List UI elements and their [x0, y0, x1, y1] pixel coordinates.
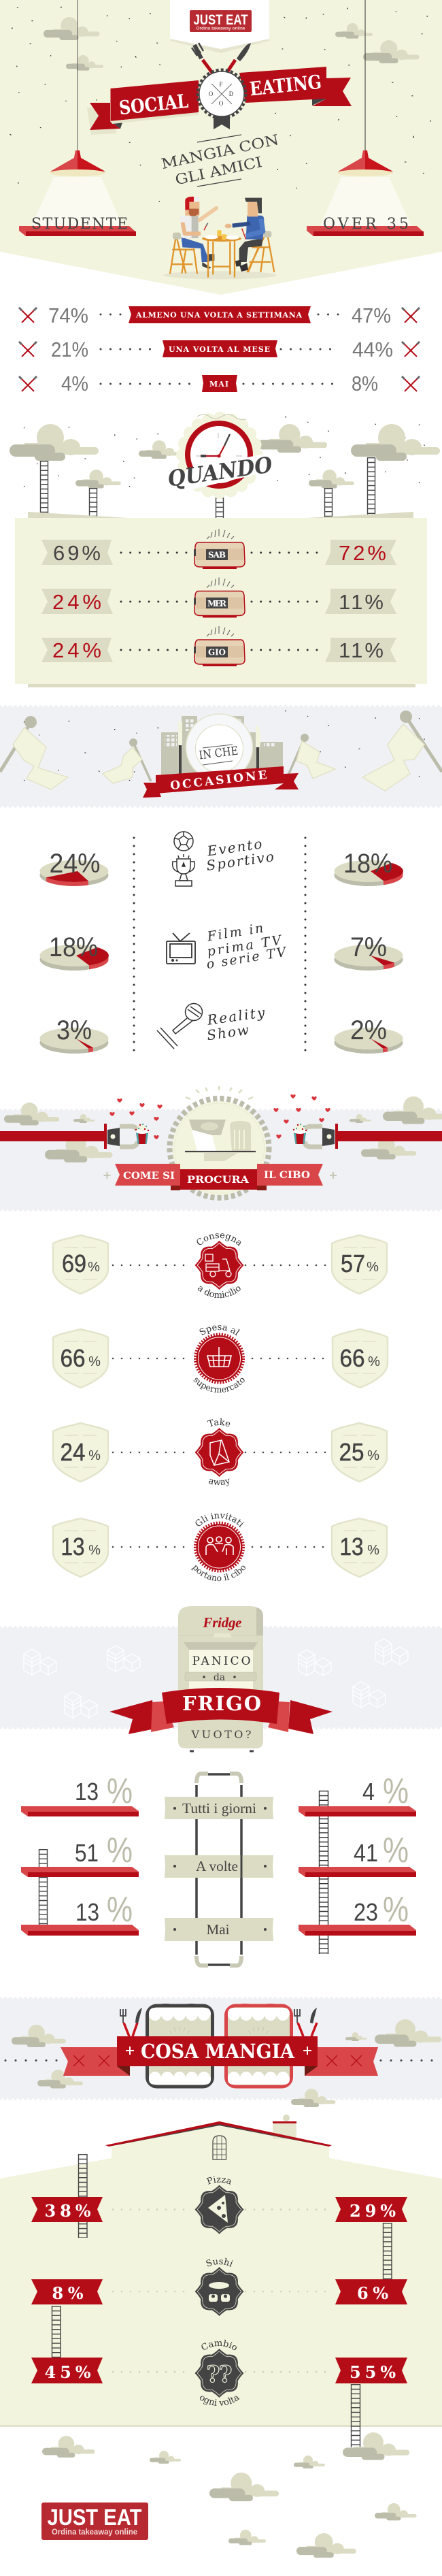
pie: 24%: 24%	[49, 849, 101, 879]
stat row: mai: 8%	[352, 372, 378, 395]
medal: food: O	[209, 91, 214, 97]
method row: take away: %	[367, 1448, 379, 1463]
sign: mai: Mai	[207, 1921, 230, 1938]
method row: spesa al supermercato: %	[88, 1354, 101, 1369]
label: reality show: Reality	[205, 1004, 266, 1028]
panel: quando	[15, 512, 427, 687]
ribbon: come si procura il cibo: COME SI	[123, 1171, 175, 1181]
pie: 18% left: 18%	[49, 932, 98, 962]
food row: cambio ogni volta	[31, 2340, 407, 2406]
label: film in prima tv o serie tv	[205, 921, 288, 972]
logo: just eat: Ordina takeaway online	[196, 26, 245, 31]
footer logo: just eat: Ordina takeaway online	[52, 2528, 137, 2537]
shelf row right: 41%	[299, 1831, 416, 1877]
building ladders	[52, 2154, 392, 2447]
label: film in prima tv o serie tv: prima TV	[206, 932, 284, 960]
two framed plates	[147, 2004, 291, 2087]
illustration: two friends eating at a table	[163, 197, 277, 279]
right friend	[225, 198, 264, 272]
food row: sushi	[31, 2258, 407, 2316]
method row: consegna a domicilio: 57	[341, 1250, 365, 1277]
subtitle: mangia con gli amici	[160, 131, 280, 188]
title ribbon: social eating: EATING	[249, 71, 322, 101]
shelf row left: 13% bottom	[21, 1890, 139, 1936]
quando row: sabato: SAB	[208, 550, 226, 559]
title ribbon: social eating	[87, 67, 352, 135]
stat row: almeno una volta a settimana: ALMENO UNA VOLTA A SETTIMANA	[135, 310, 302, 320]
subtitle: mangia con gli amici: GLI AMICI	[173, 154, 264, 188]
belt right with clamp and cupcake	[293, 1124, 442, 1149]
method row: spesa al supermercato: Spesa al	[199, 1325, 240, 1335]
flags right	[288, 711, 442, 791]
stat row: una volta al mese: 21%	[51, 338, 88, 361]
belt left with clamp and cupcake	[0, 1124, 149, 1149]
logo tab	[170, 0, 269, 53]
method row: spesa al supermercato: 66	[340, 1344, 364, 1372]
method row: take away: 24	[60, 1438, 86, 1466]
method row: take away: Take	[207, 1418, 230, 1426]
band: panico da frigo	[0, 1628, 442, 1727]
quando row: mercoledi: 11%	[339, 590, 384, 614]
ribbon: come si procura il cibo: IL CIBO	[264, 1170, 310, 1181]
pie: 7%: 7%	[350, 932, 387, 962]
food row: pizza: 29%	[350, 2201, 396, 2221]
ribbon: occasione: OCCASIONE	[169, 768, 268, 793]
cosa mangia clouds	[12, 2019, 441, 2107]
quando row: sabato: 69%	[53, 541, 101, 565]
attic window	[213, 2136, 226, 2159]
fridge	[178, 1606, 263, 1751]
footer logo: just eat	[41, 2502, 148, 2540]
method row: gli invitati portano il cibo: %	[88, 1543, 101, 1558]
lamp left: studente	[19, 0, 136, 236]
food row: cambio ogni volta: ??	[207, 2361, 233, 2388]
stat row: almeno una volta a settimana: 47%	[352, 304, 391, 327]
ribbon: frigo	[109, 1688, 333, 1734]
label: evento sportivo: Evento	[205, 836, 263, 860]
footer logo: just eat: JUST EAT	[48, 2505, 141, 2530]
fork and knife pairs	[120, 2008, 317, 2036]
hero background	[0, 0, 442, 295]
icon: ball and trophy	[173, 832, 194, 886]
shelf row right: 23%: 23	[354, 1898, 378, 1926]
medal: food: D	[229, 91, 234, 97]
subtitle: mangia con gli amici: MANGIA CON	[160, 131, 280, 172]
shelf row left: 13%: %	[107, 1772, 133, 1811]
method row: take away: away	[208, 1478, 230, 1486]
method row: take away: %	[88, 1448, 101, 1463]
ribbon: cosa mangia	[61, 2036, 378, 2076]
food row: pizza	[31, 2176, 407, 2234]
food row: sushi: 8%	[52, 2283, 84, 2303]
method row: spesa al supermercato: supermercato	[193, 1377, 245, 1392]
building	[0, 2115, 442, 2427]
shelf row right: 23%	[299, 1890, 416, 1936]
quando row: sabato	[41, 529, 396, 569]
quando ladders	[41, 457, 375, 519]
shelf row right: 4%	[299, 1772, 416, 1816]
shelf row left: 13%: 13	[75, 1778, 99, 1806]
food row: sushi: Sushi	[206, 2258, 233, 2267]
stat row: mai: 4%	[61, 372, 88, 395]
stat row: mai	[19, 372, 420, 395]
cube patterns	[24, 1639, 408, 1718]
pie: 3%: 3%	[56, 1015, 92, 1045]
sign: tutti i giorni	[165, 1797, 273, 1819]
shelf row right: 4%: %	[383, 1772, 409, 1811]
quando row: mercoledi: MER	[207, 599, 227, 608]
quando row: giovedi: GIO	[208, 648, 226, 657]
crossed fork and knife	[192, 43, 251, 74]
shelf row right: 41%: 41	[354, 1839, 378, 1867]
band: come si procura	[0, 1111, 442, 1209]
quando row: giovedi: 11%	[339, 638, 384, 662]
clock badge: quando: QUANDO	[166, 451, 274, 492]
quando clouds	[10, 424, 440, 489]
method row: consegna a domicilio: a domicilio	[197, 1286, 241, 1299]
food row: cambio ogni volta: 45%	[45, 2362, 91, 2382]
label: reality show: Show	[206, 1022, 250, 1043]
ribbon: occasione	[143, 766, 299, 798]
icon: microphone	[157, 1003, 203, 1049]
pie: 24%	[39, 849, 109, 886]
method row: spesa al supermercato: 66	[60, 1344, 86, 1372]
stat row: almeno una volta a settimana: 74%	[48, 304, 88, 327]
pie: 2%: 2%	[350, 1015, 387, 1045]
flags left	[0, 716, 151, 789]
shelf row left: 51%	[21, 1831, 139, 1925]
quando row: giovedi: 24%	[52, 638, 101, 662]
sunburst badge with tray	[170, 1086, 268, 1197]
method row: consegna a domicilio: %	[367, 1260, 379, 1275]
method row: gli invitati portano il cibo: %	[367, 1543, 379, 1558]
pie: 2%	[335, 1015, 403, 1054]
shelf row right: 4%: 4	[362, 1778, 375, 1806]
lamp left: studente: STUDENTE	[31, 216, 128, 233]
food row: pizza: 38%	[45, 2201, 91, 2221]
dotted line behind ribbon	[5, 2059, 434, 2061]
method row: consegna a domicilio	[52, 1233, 388, 1299]
label: reality show	[205, 1004, 266, 1043]
clock badge: quando	[166, 414, 274, 492]
shelf row left: 51%: 51	[75, 1839, 99, 1867]
stat row: una volta al mese	[19, 338, 420, 361]
fridge: PANICO	[192, 1654, 250, 1668]
ribbon: frigo: FRIGO	[182, 1692, 261, 1715]
left friend	[180, 197, 216, 269]
logo: just eat: JUST EAT	[193, 12, 248, 28]
fridge: VUOTO?	[190, 1728, 252, 1741]
medal: food: F	[219, 81, 223, 88]
procura clouds	[4, 1096, 442, 1162]
medal: food	[199, 71, 245, 129]
icon: tv	[167, 933, 195, 964]
method row: gli invitati portano il cibo: 13	[340, 1533, 363, 1561]
stat row: una volta al mese: UNA VOLTA AL MESE	[169, 345, 270, 354]
hero specks	[10, 7, 430, 202]
chimney	[273, 2115, 296, 2139]
lamp right: over 35	[307, 0, 424, 236]
vertical dotted separators	[134, 838, 305, 1052]
method row: take away: 25	[339, 1438, 364, 1466]
method row: gli invitati portano il cibo	[52, 1512, 388, 1582]
fridge: da	[214, 1672, 225, 1683]
method row: gli invitati portano il cibo: portano il cibo	[190, 1565, 245, 1582]
city, plate and cutlery: IN CHE	[198, 745, 239, 762]
sign: mai	[165, 1918, 273, 1941]
label: film in prima tv o serie tv: Film in	[205, 921, 265, 945]
method row: take away	[52, 1418, 388, 1486]
ladder right of shelves	[320, 1791, 328, 1954]
pie: 3%	[39, 1015, 109, 1054]
method row: spesa al supermercato	[52, 1325, 389, 1392]
quando row: mercoledi	[41, 577, 396, 618]
method row: consegna a domicilio: Consegna	[197, 1233, 241, 1247]
food row: cambio ogni volta: 55%	[350, 2362, 396, 2382]
pie: 18% right: 18%	[343, 849, 392, 879]
food row: sushi: 6%	[357, 2283, 388, 2303]
quando row: giovedi	[41, 626, 396, 666]
sign: tutti i giorni: Tutti i giorni	[182, 1800, 256, 1816]
occasione specks	[24, 711, 424, 781]
stat row: una volta al mese: 44%	[352, 338, 393, 361]
shelf row left: 13% bottom: %	[107, 1890, 133, 1929]
title ribbon: social eating: SOCIAL	[118, 90, 190, 119]
ribbon: come si procura il cibo	[103, 1164, 337, 1190]
method row: consegna a domicilio: 69	[62, 1250, 86, 1277]
shelf row right: 41%: %	[383, 1831, 409, 1870]
stat row: almeno una volta a settimana	[19, 304, 420, 327]
sign: a volte: A volte	[196, 1858, 238, 1874]
food row: cambio ogni volta: Cambio	[201, 2340, 237, 2351]
method row: gli invitati portano il cibo: 13	[61, 1533, 84, 1561]
food row: pizza: Pizza	[207, 2176, 231, 2185]
shelf row right: 23%: %	[383, 1890, 409, 1929]
ribbon: cosa mangia: COSA MANGIA	[141, 2040, 294, 2063]
pie: 18% right	[335, 849, 403, 886]
method row: consegna a domicilio: %	[88, 1260, 100, 1275]
method row: gli invitati portano il cibo: Gli invitati	[196, 1512, 244, 1527]
label: film in prima tv o serie tv: o serie TV	[205, 945, 288, 972]
lamp right: over 35: OVER 35	[323, 216, 409, 233]
sign: a volte	[165, 1855, 273, 1878]
quando row: sabato: 72%	[339, 541, 386, 565]
label: evento sportivo: Sportivo	[205, 848, 275, 874]
band: in che occasione	[0, 707, 442, 806]
fridge: Fridge	[203, 1614, 242, 1631]
hearts	[109, 1094, 330, 1139]
method row: spesa al supermercato: %	[368, 1354, 380, 1369]
food row: cambio ogni volta: ogni volta	[200, 2396, 239, 2406]
ribbon: come si procura il cibo: PROCURA	[187, 1175, 250, 1186]
shelf row left: 13%	[21, 1772, 139, 1816]
medal: food: O	[219, 100, 224, 107]
quando row: mercoledi: 24%	[52, 590, 101, 614]
shelf row left: 51%: %	[107, 1831, 133, 1870]
central pipes	[197, 1774, 241, 1966]
quando specks	[24, 417, 424, 487]
city, plate and cutlery	[161, 714, 283, 781]
clouds: hero	[44, 17, 420, 71]
band: cosa mangia	[0, 1999, 442, 2098]
stat row: mai: MAI	[209, 380, 228, 389]
label: evento sportivo	[205, 836, 275, 874]
table	[202, 230, 241, 278]
shelf row left: 13% bottom: 13	[75, 1898, 99, 1926]
pie: 18% left	[39, 932, 109, 971]
pie: 7%	[335, 932, 403, 971]
logo: just eat	[190, 10, 252, 32]
footer clouds	[42, 2432, 417, 2558]
